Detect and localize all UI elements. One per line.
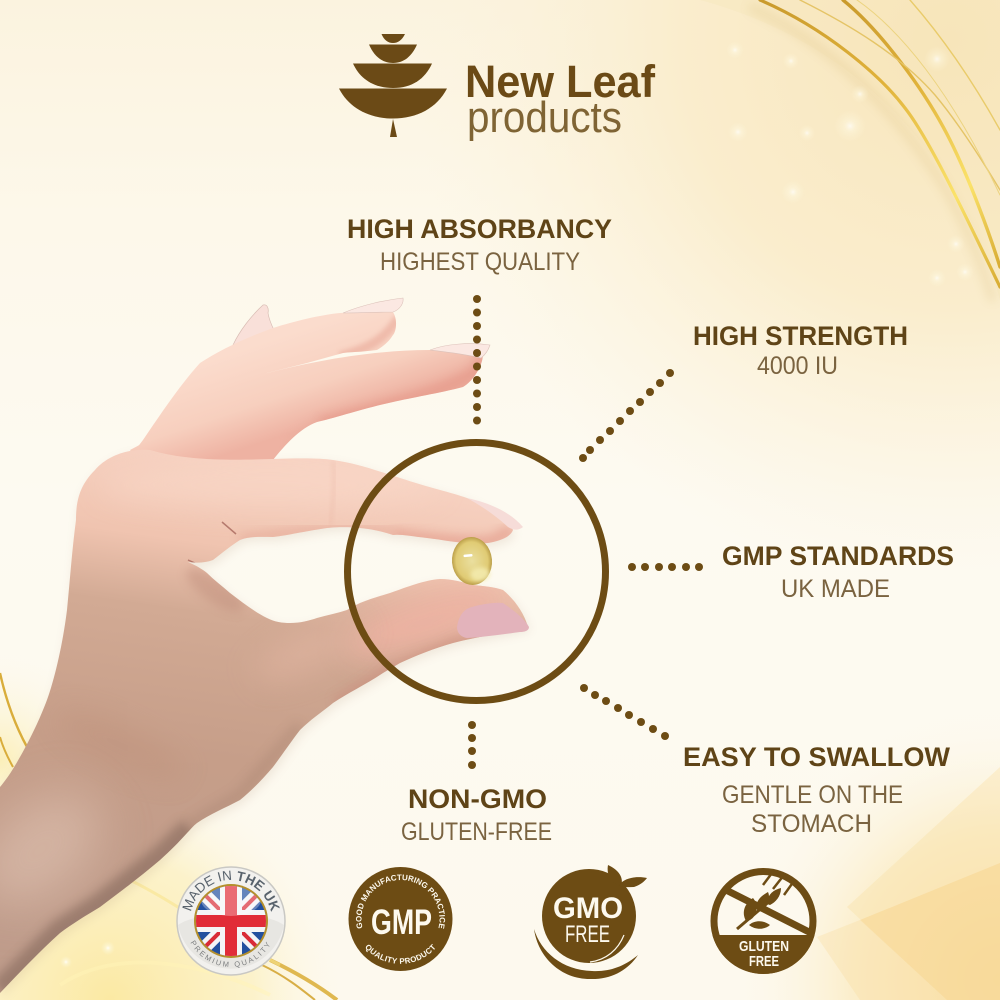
logo wordmark: New Leaf: New Leaf xyxy=(465,56,656,107)
heading: high strength: HIGH STRENGTH xyxy=(693,321,908,351)
logo wordmark: products: products xyxy=(467,93,622,142)
badge text: premium quality: PREMIUM QUALITY xyxy=(190,940,270,968)
wheat icon xyxy=(737,873,794,929)
gold ribbons top right xyxy=(752,0,1000,298)
heading: easy to swallow: EASY TO SWALLOW xyxy=(683,742,951,772)
capsule xyxy=(450,535,494,587)
badge: gluten free: FREE xyxy=(749,953,779,970)
palm, index finger and thumb xyxy=(0,450,528,993)
swoosh xyxy=(534,929,638,979)
pinky nail xyxy=(233,305,274,350)
leaves xyxy=(608,865,622,886)
hand holding capsule xyxy=(0,298,530,997)
heading: high strength xyxy=(693,321,908,380)
heading: non-gmo xyxy=(401,784,552,846)
dotted connector: high absorbancy xyxy=(473,295,481,424)
badge text: gmp: GMP xyxy=(371,903,432,942)
heading: non-gmo: NON-GMO xyxy=(408,784,547,814)
badge text: free: FREE xyxy=(565,921,610,948)
badge text: made in the uk: MADE IN THE UK xyxy=(182,870,280,912)
heading: gmp standards: UK MADE xyxy=(781,575,890,603)
ring around capsule xyxy=(348,442,606,700)
badge text: gluten free: GLUTEN xyxy=(739,938,789,955)
union jack flag xyxy=(194,884,268,958)
heading: easy to swallow: GENTLE ON THE xyxy=(722,781,903,809)
badge: gmo free xyxy=(534,865,647,979)
heading: gmp standards xyxy=(722,541,954,603)
heading: gmp standards: GMP STANDARDS xyxy=(722,541,954,571)
badge text: quality product: QUALITY PRODUCT xyxy=(366,944,435,964)
heading: non-gmo: GLUTEN-FREE xyxy=(401,818,552,846)
badge text: gmo: GMO xyxy=(553,892,623,925)
soft hand shadow xyxy=(2,454,530,997)
logo mark: tiered leaf tree xyxy=(339,34,447,137)
sparkles top right xyxy=(726,41,974,287)
badge: gluten free xyxy=(712,872,815,974)
badge: made in the uk xyxy=(176,866,286,976)
thumb nail xyxy=(457,603,529,638)
dotted connector: high strength xyxy=(579,369,674,462)
heading: easy to swallow: STOMACH xyxy=(751,810,872,838)
prohibition bar xyxy=(726,890,813,934)
skin tone overlays xyxy=(0,462,525,990)
heading: high absorbancy: HIGH ABSORBANCY xyxy=(347,214,612,244)
dotted connector: easy to swallow xyxy=(580,684,669,740)
ring finger xyxy=(139,312,396,445)
badge text: good manufacturing practice: GOOD MANUFACTURING PRACTICE xyxy=(356,874,446,929)
heading: high absorbancy: HIGHEST QUALITY xyxy=(380,248,580,276)
middle finger xyxy=(130,350,483,460)
dotted connector: non-gmo xyxy=(468,721,476,769)
middle finger nail xyxy=(430,344,490,358)
badge: gmp xyxy=(348,867,452,971)
heading: high strength: 4000 IU xyxy=(757,352,838,380)
gold ribbons bottom left xyxy=(0,673,337,1000)
heading: easy to swallow xyxy=(683,742,951,838)
heading: high absorbancy xyxy=(347,214,612,276)
ring finger nail xyxy=(343,298,403,313)
logo xyxy=(339,34,656,142)
dotted connector: gmp standards xyxy=(628,563,703,571)
index nail xyxy=(467,498,523,530)
